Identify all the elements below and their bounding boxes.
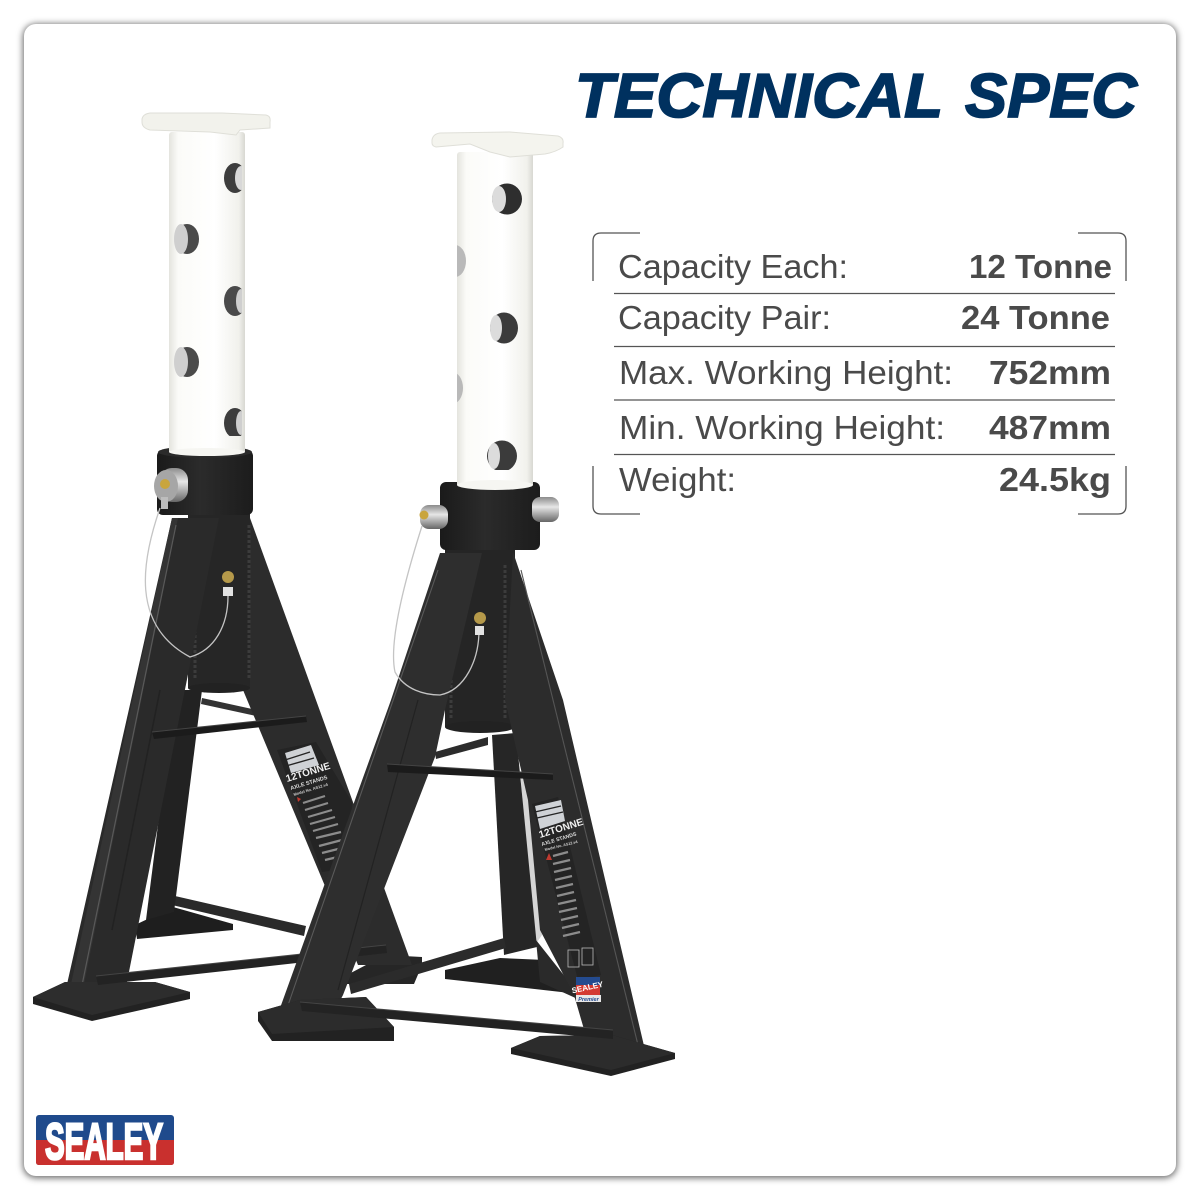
right stand warning label: 12TONNE [538,817,585,841]
row: capacity pair [618,299,1110,336]
logo: SEALEY: SEALEY [45,1113,163,1170]
left stand lanyard [145,508,228,657]
left stand warning label: AXLE STANDS [290,775,329,792]
right stand collar [440,470,540,550]
right stand left leg [275,553,482,1022]
left stand rear leg [146,690,202,920]
right stand right leg [505,552,645,1050]
row: min working height: Min. Working Height: [619,409,945,446]
right stand warning label: AXLE STANDS [541,831,578,848]
left stand right foot [345,955,422,984]
left stand label leg [243,518,412,965]
left stand front leg [63,518,219,1002]
row: max working height [619,354,1111,391]
right stand lanyard screw [474,612,486,635]
left stand rear bracing bars [172,698,306,936]
right stand warning label: Model No. AS12.v4 [544,840,579,852]
row: weight: Weight: [619,461,736,498]
row: weight [619,461,1111,498]
row: min working height: 487mm [989,409,1111,446]
illustration: right axle stand [258,132,675,1076]
right stand brand badge [571,977,605,1003]
spec table [593,233,1126,514]
right stand gap highlight [520,770,542,945]
left stand warning label [277,742,352,872]
left stand centre tube [188,510,250,693]
right stand warning label [532,797,601,980]
left stand white column [169,132,247,454]
row: weight: 24.5kg [999,461,1111,498]
left stand ground bar [96,945,387,985]
illustration: left axle stand [33,113,422,1021]
row: capacity each [618,248,1112,285]
row: min working height [619,409,1111,446]
right stand brand badge: SEALEY [571,980,605,995]
right stand rear foot [445,958,573,993]
row: max working height: 752mm [989,354,1111,391]
left stand locking pin [154,468,188,509]
logo: SEALEY [36,1113,174,1170]
right stand ground bar rear [349,938,506,994]
row: capacity each: 12 Tonne [969,248,1112,285]
right stand rear bar [435,737,488,759]
left stand cross bar [152,716,307,739]
right stand front cross bar [387,764,553,780]
right stand rear leg [492,733,537,955]
left stand rear foot [135,907,233,939]
right stand centre tube [445,545,515,733]
left stand warning label: 12TONNE [285,761,332,785]
right stand brand badge: Premier [578,997,600,1003]
left stand front foot [33,982,190,1021]
right stand right foot [511,1035,675,1076]
row: capacity pair: Capacity Pair: [618,299,831,336]
right stand lanyard [394,526,479,695]
left stand warning label: Model No. AS12.v4 [293,782,329,797]
right stand locking pin left [420,505,448,529]
left stand collar [157,436,253,515]
right stand white column [457,152,533,470]
right stand front ground bar [300,1002,613,1039]
corner brackets [593,233,1126,514]
row: capacity pair: 24 Tonne [961,299,1110,336]
title: TECHNICAL [575,62,943,131]
left stand lanyard screw [222,571,234,596]
right stand gusset [536,940,580,1000]
title: SPEC [965,62,1138,131]
row: max working height: Max. Working Height: [619,354,953,391]
row: capacity each: Capacity Each: [618,248,848,285]
right stand saddle [432,132,563,157]
left stand saddle [142,113,270,135]
right stand locking pin right [532,497,559,522]
right stand left foot [258,997,394,1041]
